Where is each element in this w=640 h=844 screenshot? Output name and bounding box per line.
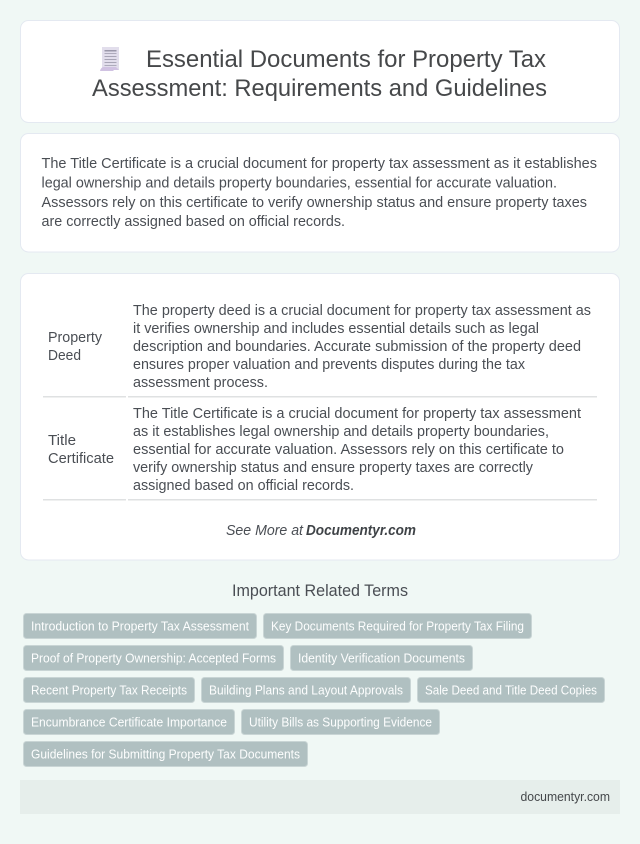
chip (242, 710, 440, 734)
row label: Title Certificate: Certificate (48, 451, 114, 467)
chip (264, 614, 532, 638)
title: Essential Documents for Property Tax (146, 46, 546, 73)
chip (24, 710, 234, 734)
related terms chips (24, 614, 604, 766)
row description: Title Certificate: assigned based on official records. (133, 478, 354, 494)
intro paragraph (42, 156, 597, 230)
see more link: See More at (226, 523, 304, 539)
chip: Recent Property Tax Receipts (31, 682, 187, 698)
row label: Property Deed (48, 330, 103, 364)
row description: Title Certificate: The Title Certificate is a crucial document for property tax assessment (133, 406, 581, 422)
row description: Property Deed: The property deed is a crucial document for property tax assessment as (133, 303, 591, 319)
row label: Property Deed: Property (48, 330, 103, 346)
chip: Building Plans and Layout Approvals (209, 682, 403, 698)
title (92, 46, 547, 102)
icon: document scroll (100, 47, 119, 71)
row description: Title Certificate: as it establishes legal ownership and details property boundaries, (133, 424, 549, 440)
row description: Property Deed: description and boundaries. Accurate submission of the property deed (133, 339, 581, 355)
row description: Title Certificate (133, 406, 581, 494)
row description: Property Deed: it verifies ownership and includes essential details such as legal (133, 321, 539, 337)
see more link (226, 523, 416, 539)
chip: Identity Verification Documents (298, 650, 465, 666)
row description: Property Deed: ensures proper valuation and prevents disputes during the tax (133, 357, 526, 373)
see more link: Documentyr.com (306, 523, 416, 539)
chip (24, 678, 194, 702)
row label: Title Certificate: Title (48, 433, 76, 449)
chip (202, 678, 410, 702)
heading: important related terms: Important Related Terms (232, 581, 408, 600)
intro paragraph: Assessors rely on this certificate to verify ownership status and ensure property taxes (42, 195, 587, 211)
chip (24, 742, 308, 766)
panel: document table (20, 274, 620, 560)
chip: Sale Deed and Title Deed Copies (425, 682, 597, 698)
footer: documentyr.com (520, 789, 610, 804)
title: Assessment: Requirements and Guidelines (92, 75, 547, 102)
chip: Key Documents Required for Property Tax Filing (271, 618, 524, 634)
chip: Encumbrance Certificate Importance (31, 714, 227, 730)
chip: Utility Bills as Supporting Evidence (249, 714, 432, 730)
row description: Property Deed: assessment process. (133, 375, 268, 391)
row description: Title Certificate: verify ownership status and ensure property taxes are correctly (133, 460, 534, 476)
row label: Property Deed: Deed (48, 348, 81, 364)
intro paragraph: are correctly assigned based on official records. (42, 214, 345, 230)
chip (290, 646, 472, 670)
chip: Proof of Property Ownership: Accepted Forms (31, 650, 276, 666)
footer (20, 780, 620, 814)
chip (24, 614, 256, 638)
chip (418, 678, 604, 702)
panel: introduction (20, 134, 620, 252)
chip: Introduction to Property Tax Assessment (31, 618, 249, 634)
intro paragraph: legal ownership and details property boundaries, essential for accurate valuation. (42, 176, 557, 192)
chip: Guidelines for Submitting Property Tax Documents (31, 746, 300, 762)
intro paragraph: The Title Certificate is a crucial document for property tax assessment as it establishes (42, 156, 597, 172)
row description: Title Certificate: essential for accurate valuation. Assessors rely on this certificate to (133, 442, 564, 458)
row description: Property Deed (133, 303, 591, 391)
row label: Title Certificate (48, 433, 114, 467)
chip (24, 646, 284, 670)
panel: header (20, 20, 620, 122)
